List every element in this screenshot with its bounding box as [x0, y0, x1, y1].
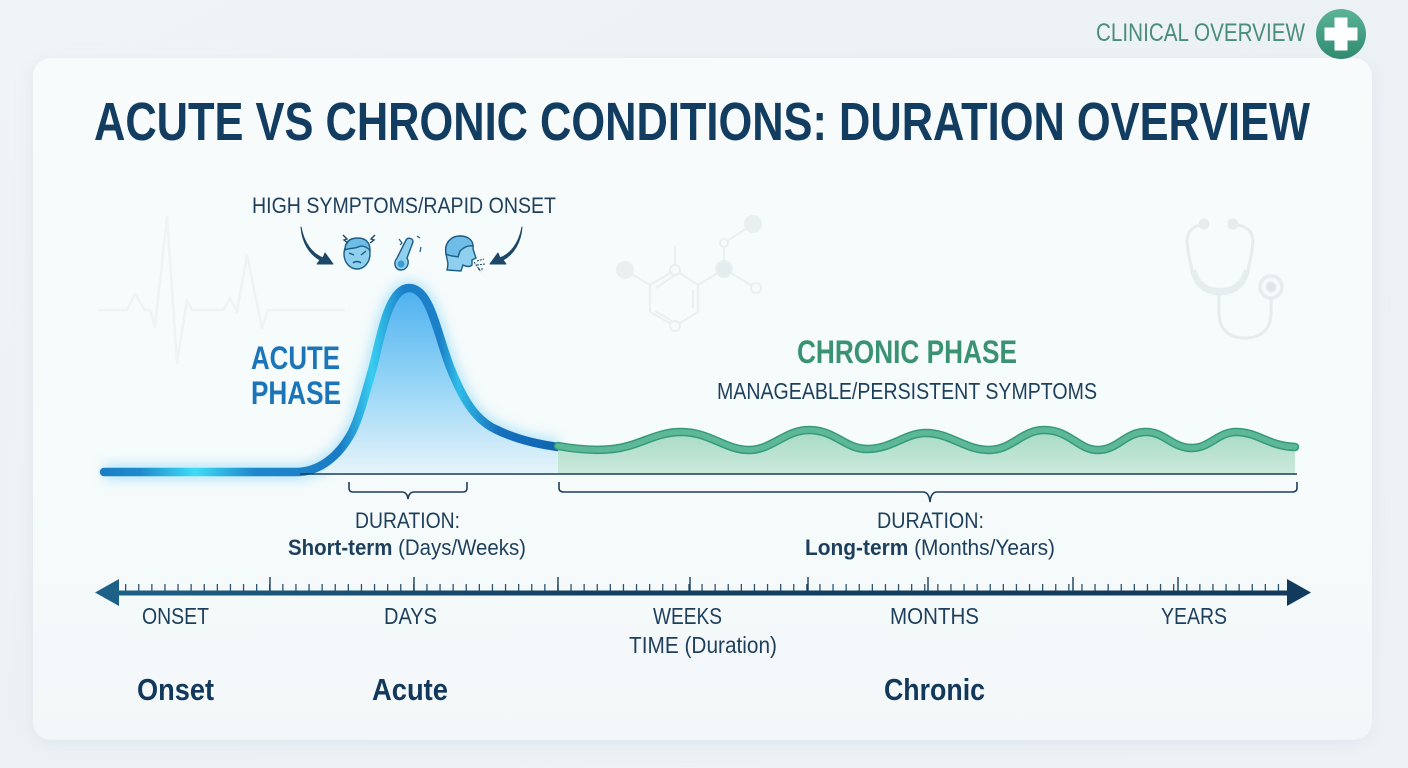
chronic phase label: CHRONIC PHASE	[797, 334, 1017, 370]
icon: coughing profile	[446, 236, 485, 272]
arrow: right symptom pointer	[490, 227, 522, 264]
chronic duration text: Long-term (Months/Years)	[805, 535, 1055, 560]
axis labels: TIME (Duration)	[629, 632, 777, 658]
chart: chronic curve	[558, 430, 1295, 474]
axis line	[112, 590, 1292, 596]
axis labels: ONSET	[142, 603, 209, 629]
chronic symptoms description: MANAGEABLE/PERSISTENT SYMPTOMS	[717, 378, 1097, 404]
chronic duration text: DURATION:	[877, 508, 984, 533]
bracket: acute duration	[349, 482, 467, 499]
chronic wave outline	[558, 430, 1295, 450]
acute curve line	[104, 288, 558, 472]
axis labels: MONTHS	[890, 603, 979, 629]
acute phase label: PHASE	[251, 375, 341, 411]
chronic wave highlight	[558, 430, 1295, 450]
arrow: axis left end	[95, 579, 119, 606]
acute area fill	[320, 288, 558, 474]
phase summary labels: Chronic	[884, 672, 985, 707]
icon: faint heartbeat line	[98, 217, 345, 363]
minor ticks	[125, 584, 1285, 593]
acute duration text	[288, 508, 526, 560]
chronic duration text	[805, 508, 1055, 560]
header tag: clinical overview	[1096, 9, 1366, 59]
axis labels: WEEKS	[653, 603, 722, 629]
icon: faint stethoscope	[1187, 220, 1282, 338]
acute duration text: DURATION:	[355, 508, 460, 533]
chronic area fill	[558, 430, 1295, 474]
callout: high symptoms: HIGH SYMPTOMS/RAPID ONSET	[252, 193, 556, 218]
time axis	[95, 577, 1311, 606]
axis labels: DAYS	[384, 603, 437, 629]
phase summary labels: Acute	[372, 672, 448, 707]
icon: headache face	[343, 235, 375, 269]
icon: faint molecule	[617, 216, 761, 331]
arrow: axis right end	[1287, 579, 1311, 606]
arrow: left symptom pointer	[301, 227, 333, 264]
bracket: chronic duration	[559, 482, 1297, 502]
phase summary labels	[137, 672, 985, 707]
tag label: CLINICAL OVERVIEW	[1096, 19, 1305, 47]
chart baseline	[300, 473, 1297, 475]
chart: acute curve	[104, 288, 558, 474]
axis labels: YEARS	[1161, 603, 1227, 629]
axis labels	[142, 603, 1227, 658]
icon: medical cross badge	[1316, 9, 1366, 59]
acute phase label: ACUTE	[251, 340, 340, 376]
acute curve glow	[104, 288, 558, 472]
acute duration text: Short-term (Days/Weeks)	[288, 535, 526, 560]
phase summary labels: Onset	[137, 672, 214, 707]
icon: thermometer	[395, 236, 421, 270]
acute phase label	[251, 340, 341, 411]
major ticks	[270, 577, 1178, 593]
